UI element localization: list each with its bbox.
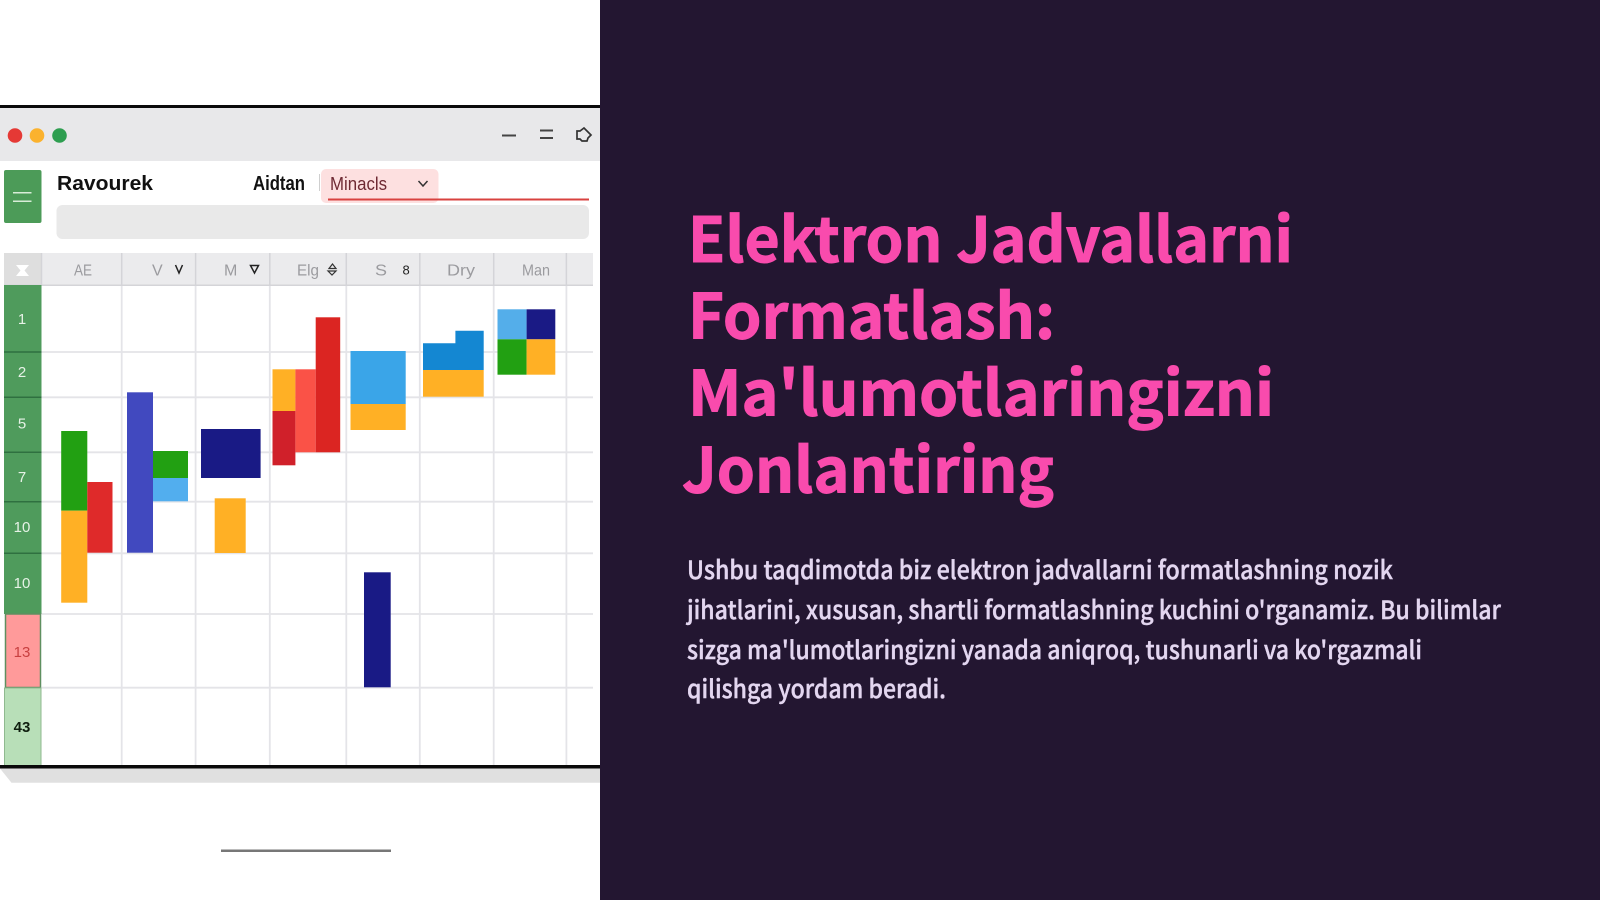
dropdown	[319, 169, 589, 203]
table header row	[4, 253, 593, 286]
title	[682, 190, 1293, 510]
icon: green menu button	[4, 170, 42, 223]
row number column: 5	[18, 416, 26, 432]
description text: jihatlarini, xususan, shartli formatlashning kuchini o'rganamiz. Bu bilimlar	[685, 591, 1502, 627]
column E blocks	[272, 317, 340, 465]
row number column: 10	[14, 575, 30, 592]
table header row: 8	[402, 262, 410, 278]
column A blocks	[61, 431, 112, 603]
home indicator	[221, 850, 391, 852]
toolbar labels: Aidtan	[253, 173, 305, 195]
column M blocks	[201, 429, 261, 553]
column V blocks	[127, 392, 188, 553]
row number column: 43	[14, 719, 30, 736]
title: Elektron Jadvallarni	[688, 190, 1293, 280]
table header row: Man	[522, 262, 550, 280]
description text: sizga ma'lumotlaringizni yanada aniqroq, tushunarli va ko'rgazmali	[687, 631, 1422, 667]
title: Ma'lumotlaringizni	[688, 344, 1274, 434]
title: Jonlantiring	[682, 420, 1054, 510]
column M quad blocks	[498, 309, 555, 375]
column D blocks	[423, 331, 484, 397]
row number column: 7	[18, 469, 26, 486]
row number column: 2	[18, 364, 26, 381]
dropdown: Minacls	[330, 174, 387, 194]
row number column: 13	[14, 644, 30, 661]
toolbar labels: Ravourek	[57, 173, 154, 195]
toolbar labels	[57, 173, 305, 195]
row number column: 10	[14, 519, 30, 536]
search bar	[56, 205, 589, 239]
description text: qilishga yordam beradi.	[687, 670, 946, 706]
row number column: 1	[18, 311, 26, 328]
panel: spreadsheet illustration	[0, 0, 600, 900]
table header row: Elg	[297, 262, 319, 280]
description text	[685, 551, 1502, 706]
description text: Ushbu taqdimotda biz elektron jadvallarni formatlashning nozik	[687, 551, 1394, 587]
column S blocks	[350, 351, 406, 687]
window top edge	[0, 105, 600, 108]
window shelf	[0, 768, 600, 783]
row number column	[4, 285, 42, 766]
title: Formatlash:	[688, 266, 1055, 356]
table header row: Dry	[447, 262, 475, 280]
table header row: AE	[74, 262, 92, 280]
window title bar	[0, 108, 600, 161]
table grid	[42, 285, 593, 766]
panel: dark background	[600, 0, 1600, 900]
table header row: M	[224, 262, 237, 280]
conditional formatting blocks	[61, 309, 555, 687]
table header row: S	[375, 262, 387, 280]
table header row: V	[152, 262, 163, 280]
window bottom edge	[0, 765, 600, 768]
